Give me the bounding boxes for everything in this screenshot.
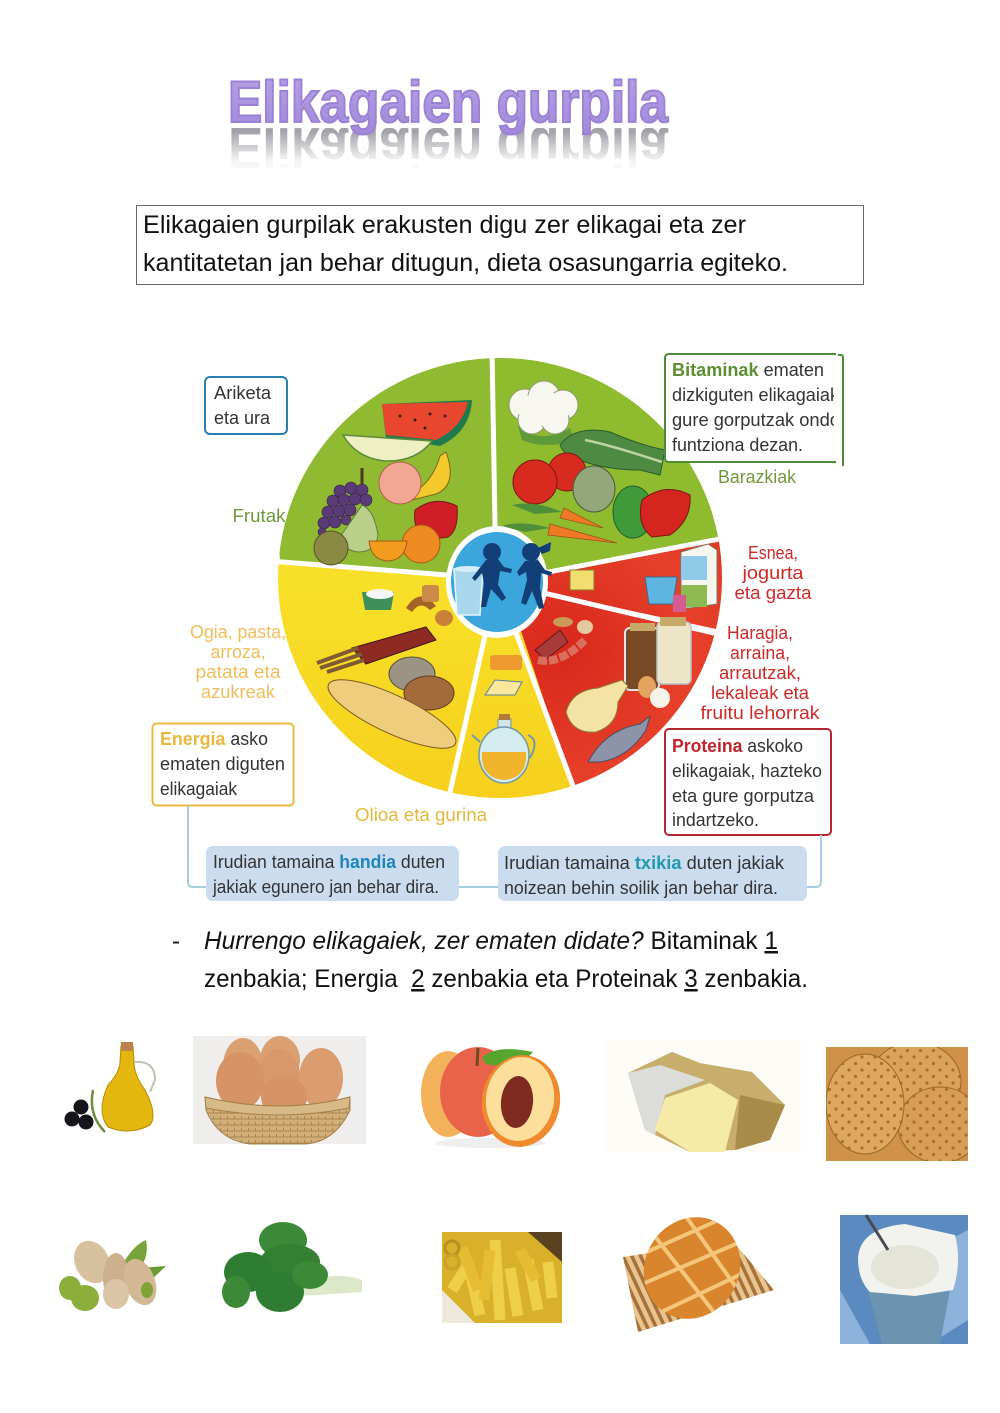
icon: pear [342,505,378,552]
icon: eggs [638,676,656,698]
icon: small burger [435,610,453,626]
icon: chicken [566,680,628,732]
callout: Bitaminak: Bitaminak ematen [672,359,824,380]
photo: pistachios [59,1235,166,1311]
intro text box [136,206,864,284]
food wheel diagram [152,350,843,901]
photo: eggs in basket [193,1036,366,1144]
icon: watermelon [382,400,472,446]
icon: yogurt [645,577,677,604]
icon: orange [402,525,440,563]
label: Haragia, arraina, arrautzak, lekaleak eta fruitu lehorrak: arrautzak, [719,662,801,683]
label: Ogia, pasta, arroza, patata eta azukreak: patata eta [196,661,281,682]
title: Elikagaien gurpila [230,78,670,166]
fruits group illustrations [314,400,472,565]
icon: potatoes [389,657,435,691]
instruction text: - [172,928,180,955]
intro text box: Elikagaien gurpilak erakusten digu zer elikagai eta zer [143,211,746,239]
callout: Proteina: eta gure gorputza [672,785,815,806]
photo: bread on board [623,1217,774,1332]
note: txikia: noizean behin soilik jan behar dira. [504,877,778,898]
callout: Proteina: elikagaiak, hazteko [672,760,822,781]
icon: grapes [318,468,372,536]
photo: penne pasta [442,1232,562,1323]
icon: muffin [422,585,439,602]
icon: apple [415,501,457,538]
note: handia [206,846,459,901]
centre circle: water and running children [446,526,552,638]
icon: cheese [570,570,594,590]
vegetables group illustrations [502,381,690,543]
icon: carrots [502,504,617,543]
photo: olive oil bottle [64,1042,155,1132]
callout: Proteina: indartzeko. [672,809,759,830]
icon: jars [625,617,691,690]
label: Ogia, pasta, arroza, patata eta azukreak: Ogia, pasta, [190,621,286,642]
callout: Energia: ematen diguten [160,753,285,774]
callout: Ariketa eta ura: Ariketa [214,382,272,403]
photo: yogurt [840,1215,968,1344]
callout: Energia: elikagaiak [160,778,238,799]
icon: fish [588,716,650,762]
label: Esnea, jogurta eta gazta: Esnea, [748,542,798,563]
label: Ogia, pasta, arroza, patata eta azukreak [190,621,286,702]
icon: croissant [406,596,436,612]
note: handia: Irudian tamaina handia duten [213,851,445,872]
label: Ogia, pasta, arroza, patata eta azukreak: azukreak [201,681,276,702]
icon: kiwi [314,531,348,565]
icon: cabbage leaf [560,430,665,475]
cereals group illustrations [317,585,463,761]
instruction text [172,927,808,993]
icon: sausages [535,617,593,661]
icon: oil jug [472,714,535,783]
label: Haragia, arraina, arrautzak, lekaleak eta fruitu lehorrak: Haragia, [727,622,793,643]
icon: running children [472,542,552,609]
label: Esnea, jogurta eta gazta [734,542,812,603]
instruction text: zenbakia; Energia 2 zenbakia eta Proteinak 3 zenbakia. [204,965,808,993]
label: Olioa eta gurina: Olioa eta gurina [355,804,488,825]
callout: Bitaminak: gure gorputzak ondo [672,409,840,430]
icon: cauliflower [509,381,578,445]
icon: artichoke [573,466,615,512]
protein group illustrations [535,617,691,762]
photo: peach [421,1047,566,1152]
label: Haragia, arraina, arrautzak, lekaleak eta fruitu lehorrak: lekaleak eta [711,682,810,703]
callout: Energia [152,724,294,806]
label: Frutak: Frutak [232,505,286,526]
callout: Energia: Energia asko [160,728,268,749]
wheel sectors [270,350,735,810]
icon: small bottle [673,595,686,612]
fats group illustrations [472,655,535,783]
callout: Bitaminak: dizkiguten elikagaiak [672,384,840,405]
note: txikia [498,846,807,901]
icon: cup [490,655,522,670]
label: Haragia, arraina, arrautzak, lekaleak eta fruitu lehorrak [700,622,820,723]
icon: melon [343,435,432,461]
label: Haragia, arraina, arrautzak, lekaleak eta fruitu lehorrak: fruitu lehorrak [700,702,820,723]
icon: butter [485,680,522,695]
callout: Proteina [665,729,831,835]
callout: Bitaminak: funtziona dezan. [672,434,803,455]
photo: butter in foil [605,1040,801,1152]
callout: Bitaminak [665,354,843,466]
title: Elikagaien gurpila: Elikagaien gurpila [228,115,669,180]
icon: peach [379,462,421,504]
intro text box: kantitatetan jan behar ditugun, dieta osasungarria egiteko. [143,249,788,277]
instruction text: Hurrengo elikagaiek, zer ematen didate? Bitaminak 1 [204,927,778,955]
icon: red pepper [640,490,690,537]
icon: sugar bowl [362,589,394,610]
callout: Ariketa eta ura [205,377,287,434]
icon: green pepper [613,486,653,538]
icon: banana [404,452,450,502]
icon: half orange [369,541,407,561]
dairy group illustrations [570,544,717,612]
photo: biscuits [826,1047,968,1161]
note: handia: jakiak egunero jan behar dira. [212,876,439,897]
label: Esnea, jogurta eta gazta: eta gazta [734,582,812,603]
connector lines [188,806,821,887]
label: Esnea, jogurta eta gazta: jogurta [741,562,804,583]
label: Barazkiak: Barazkiak [718,466,797,487]
icon: breadsticks [317,648,364,672]
callout: Proteina: Proteina askoko [672,735,803,756]
icon: baguette [321,667,463,761]
label: Haragia, arraina, arrautzak, lekaleak eta fruitu lehorrak: arraina, [730,642,790,663]
title: Elikagaien gurpila: Elikagaien gurpila [228,70,669,135]
callout: Ariketa eta ura: eta ura [214,407,271,428]
icon: tomatoes [513,453,586,504]
label: Ogia, pasta, arroza, patata eta azukreak: arroza, [210,641,266,662]
icon: milk carton [681,544,717,608]
note: txikia: Irudian tamaina txikia duten jakiak [504,852,785,873]
icon: glass of water [454,566,483,615]
icon: chocolate bar [352,627,436,664]
photo: chard leaves [222,1222,362,1312]
